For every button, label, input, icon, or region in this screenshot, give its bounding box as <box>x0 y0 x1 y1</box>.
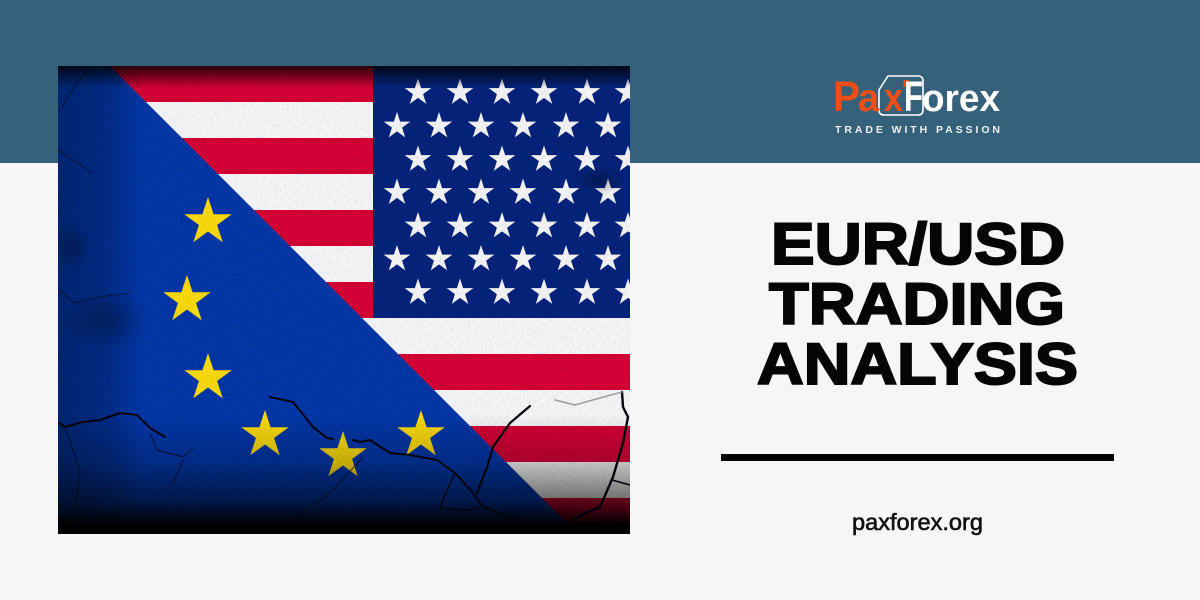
logo box <box>879 76 923 115</box>
logo: PaxForex: F <box>904 73 923 121</box>
logo tagline: TRADE WITH PASSION <box>835 124 1000 136</box>
divider rule <box>721 454 1114 461</box>
logo: PaxForex: x <box>884 76 903 120</box>
logo wordmark: P <box>833 73 860 121</box>
wall cracks <box>58 70 630 520</box>
title <box>757 212 1078 397</box>
US flag stripes <box>110 66 630 524</box>
top header band <box>0 0 1200 163</box>
flag image: EU and US flags split diagonally <box>52 66 641 534</box>
title: TRADING <box>769 272 1065 337</box>
website url: paxforex.org <box>852 509 983 535</box>
logo: PaxForex: orex <box>922 78 1000 120</box>
US flag canton with stars <box>373 66 641 318</box>
EU flag triangle <box>58 66 578 534</box>
logo: PaxForex <box>833 73 1000 136</box>
title: ANALYSIS <box>757 332 1078 397</box>
worn texture and vignette <box>52 66 630 534</box>
EU flag stars <box>163 197 445 476</box>
logo: PaxForex: a <box>858 77 879 120</box>
title: EUR/USD <box>771 212 1065 277</box>
